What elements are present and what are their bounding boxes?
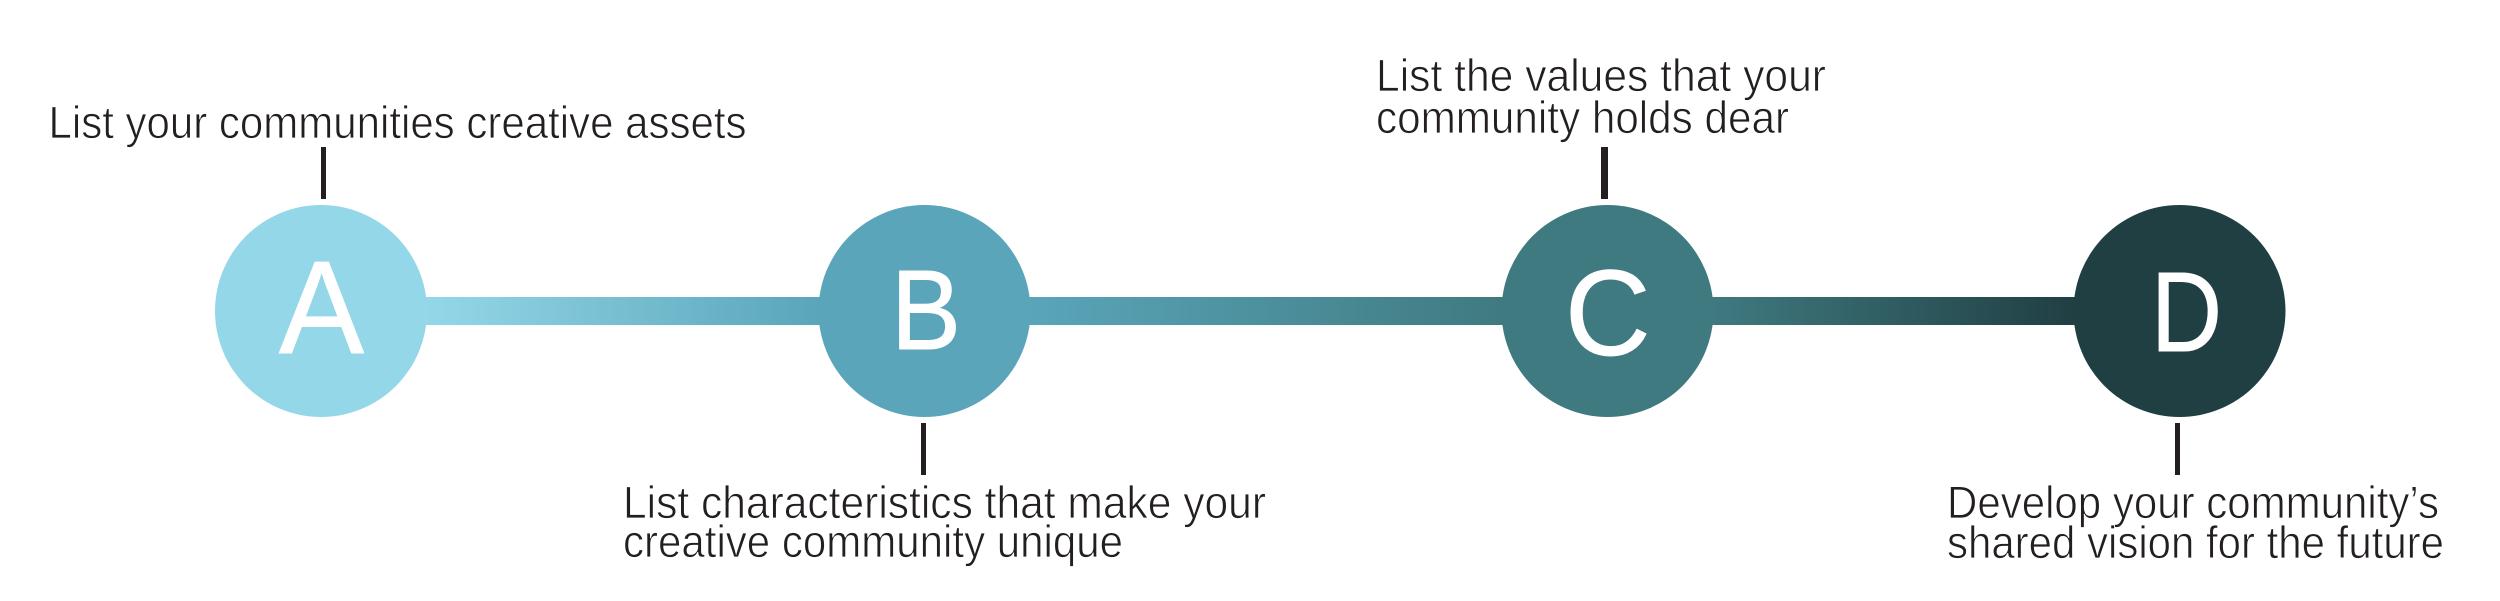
step D circle: [2074, 205, 2286, 417]
step C caption: community holds dear: [1376, 92, 1789, 143]
step D caption: Develop your community’s: [1947, 477, 2439, 528]
step B caption: [623, 477, 1266, 567]
step B tick: [921, 423, 926, 475]
step D caption: [1947, 477, 2444, 568]
step A: [48, 97, 746, 417]
step D caption: shared vision for the future: [1947, 517, 2444, 568]
step C tick: [1601, 147, 1608, 199]
step D letter: D: [2151, 249, 2222, 375]
step C caption: [1376, 50, 1826, 143]
step B: [623, 205, 1266, 567]
step B caption: creative community unique: [623, 516, 1123, 567]
connector bar B to C: [1025, 297, 1507, 325]
step B circle: [818, 205, 1030, 417]
step D tick: [2175, 423, 2180, 475]
step C caption: List the values that your: [1376, 50, 1826, 101]
step B letter: B: [891, 247, 961, 373]
connector bar A to B: [420, 297, 825, 325]
step D: [1947, 205, 2444, 568]
step C: [1376, 50, 1826, 417]
step A circle: [215, 205, 427, 417]
step C circle: [1502, 205, 1714, 417]
step B caption: List characteristics that make your: [623, 477, 1266, 528]
step A caption: List your communities creative assets: [48, 97, 746, 148]
step A letter: A: [279, 234, 364, 381]
connector bar C to D: [1708, 297, 2079, 325]
step A tick: [321, 147, 326, 199]
step C letter: C: [1565, 245, 1650, 381]
